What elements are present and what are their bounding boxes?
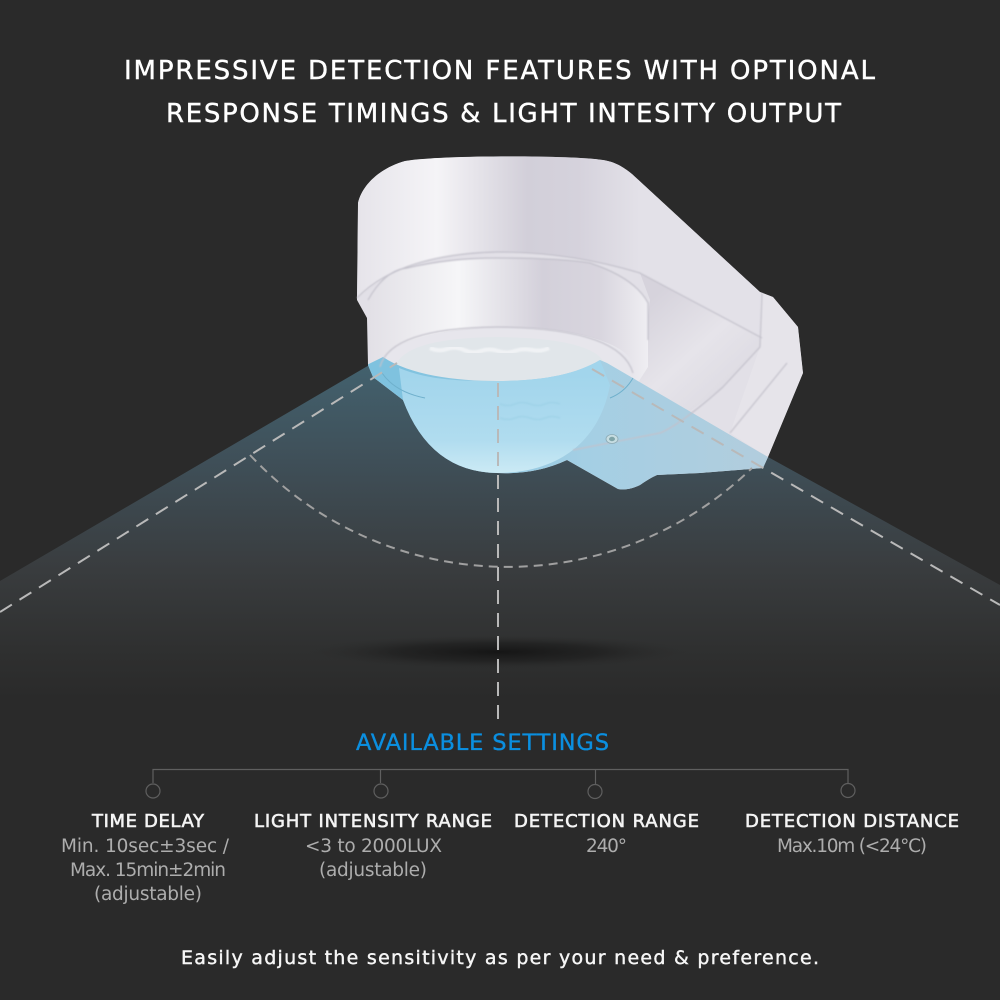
flange seam on light bbox=[382, 373, 633, 398]
settings connector bbox=[146, 770, 855, 798]
title: IMPRESSIVE DETECTION FEATURES WITH OPTIONAL bbox=[124, 56, 876, 86]
setting: time delay: TIME DELAY bbox=[91, 811, 205, 832]
setting: detection range: 240° bbox=[586, 836, 627, 857]
lens top bbox=[397, 337, 604, 385]
motion sensor device bbox=[356, 156, 803, 490]
blue light overlay bbox=[368, 357, 768, 490]
ring bottom face bbox=[426, 328, 616, 368]
setting: time delay: Min. 10sec±3sec / bbox=[61, 836, 230, 857]
dome facets bbox=[504, 417, 548, 420]
lens screw bbox=[606, 434, 618, 444]
setting: time delay: (adjustable) bbox=[94, 884, 202, 905]
setting: light intensity range bbox=[254, 811, 492, 881]
setting: detection range bbox=[514, 811, 699, 857]
housing seams bbox=[357, 252, 787, 450]
setting: detection distance: Max.10m (<24°C) bbox=[777, 836, 927, 857]
floor shadow bbox=[308, 635, 688, 669]
setting: light intensity range: (adjustable) bbox=[319, 860, 427, 881]
footer note: Easily adjust the sensitivity as per your need & preference. bbox=[181, 947, 819, 969]
lower ring bbox=[402, 259, 648, 381]
setting: detection distance: DETECTION DISTANCE bbox=[745, 811, 959, 832]
title: RESPONSE TIMINGS & LIGHT INTESITY OUTPUT bbox=[166, 99, 841, 129]
detection beam bbox=[0, 357, 1000, 700]
upper housing bbox=[357, 156, 760, 297]
lens honeycomb bbox=[430, 348, 549, 352]
setting: light intensity range: LIGHT INTENSITY RANGE bbox=[254, 811, 492, 832]
available settings heading: AVAILABLE SETTINGS bbox=[356, 730, 609, 756]
side panel bbox=[641, 274, 682, 326]
setting: light intensity range: <3 to 2000LUX bbox=[305, 836, 442, 857]
setting: time delay bbox=[61, 811, 230, 905]
dome in the beam bbox=[399, 360, 610, 473]
setting: time delay: Max. 15min±2min bbox=[70, 860, 226, 881]
title bbox=[124, 56, 876, 129]
dashed detection lines bbox=[0, 363, 1000, 720]
setting: detection distance bbox=[745, 811, 959, 857]
setting: detection range: DETECTION RANGE bbox=[514, 811, 699, 832]
rear end cap bbox=[760, 292, 803, 456]
